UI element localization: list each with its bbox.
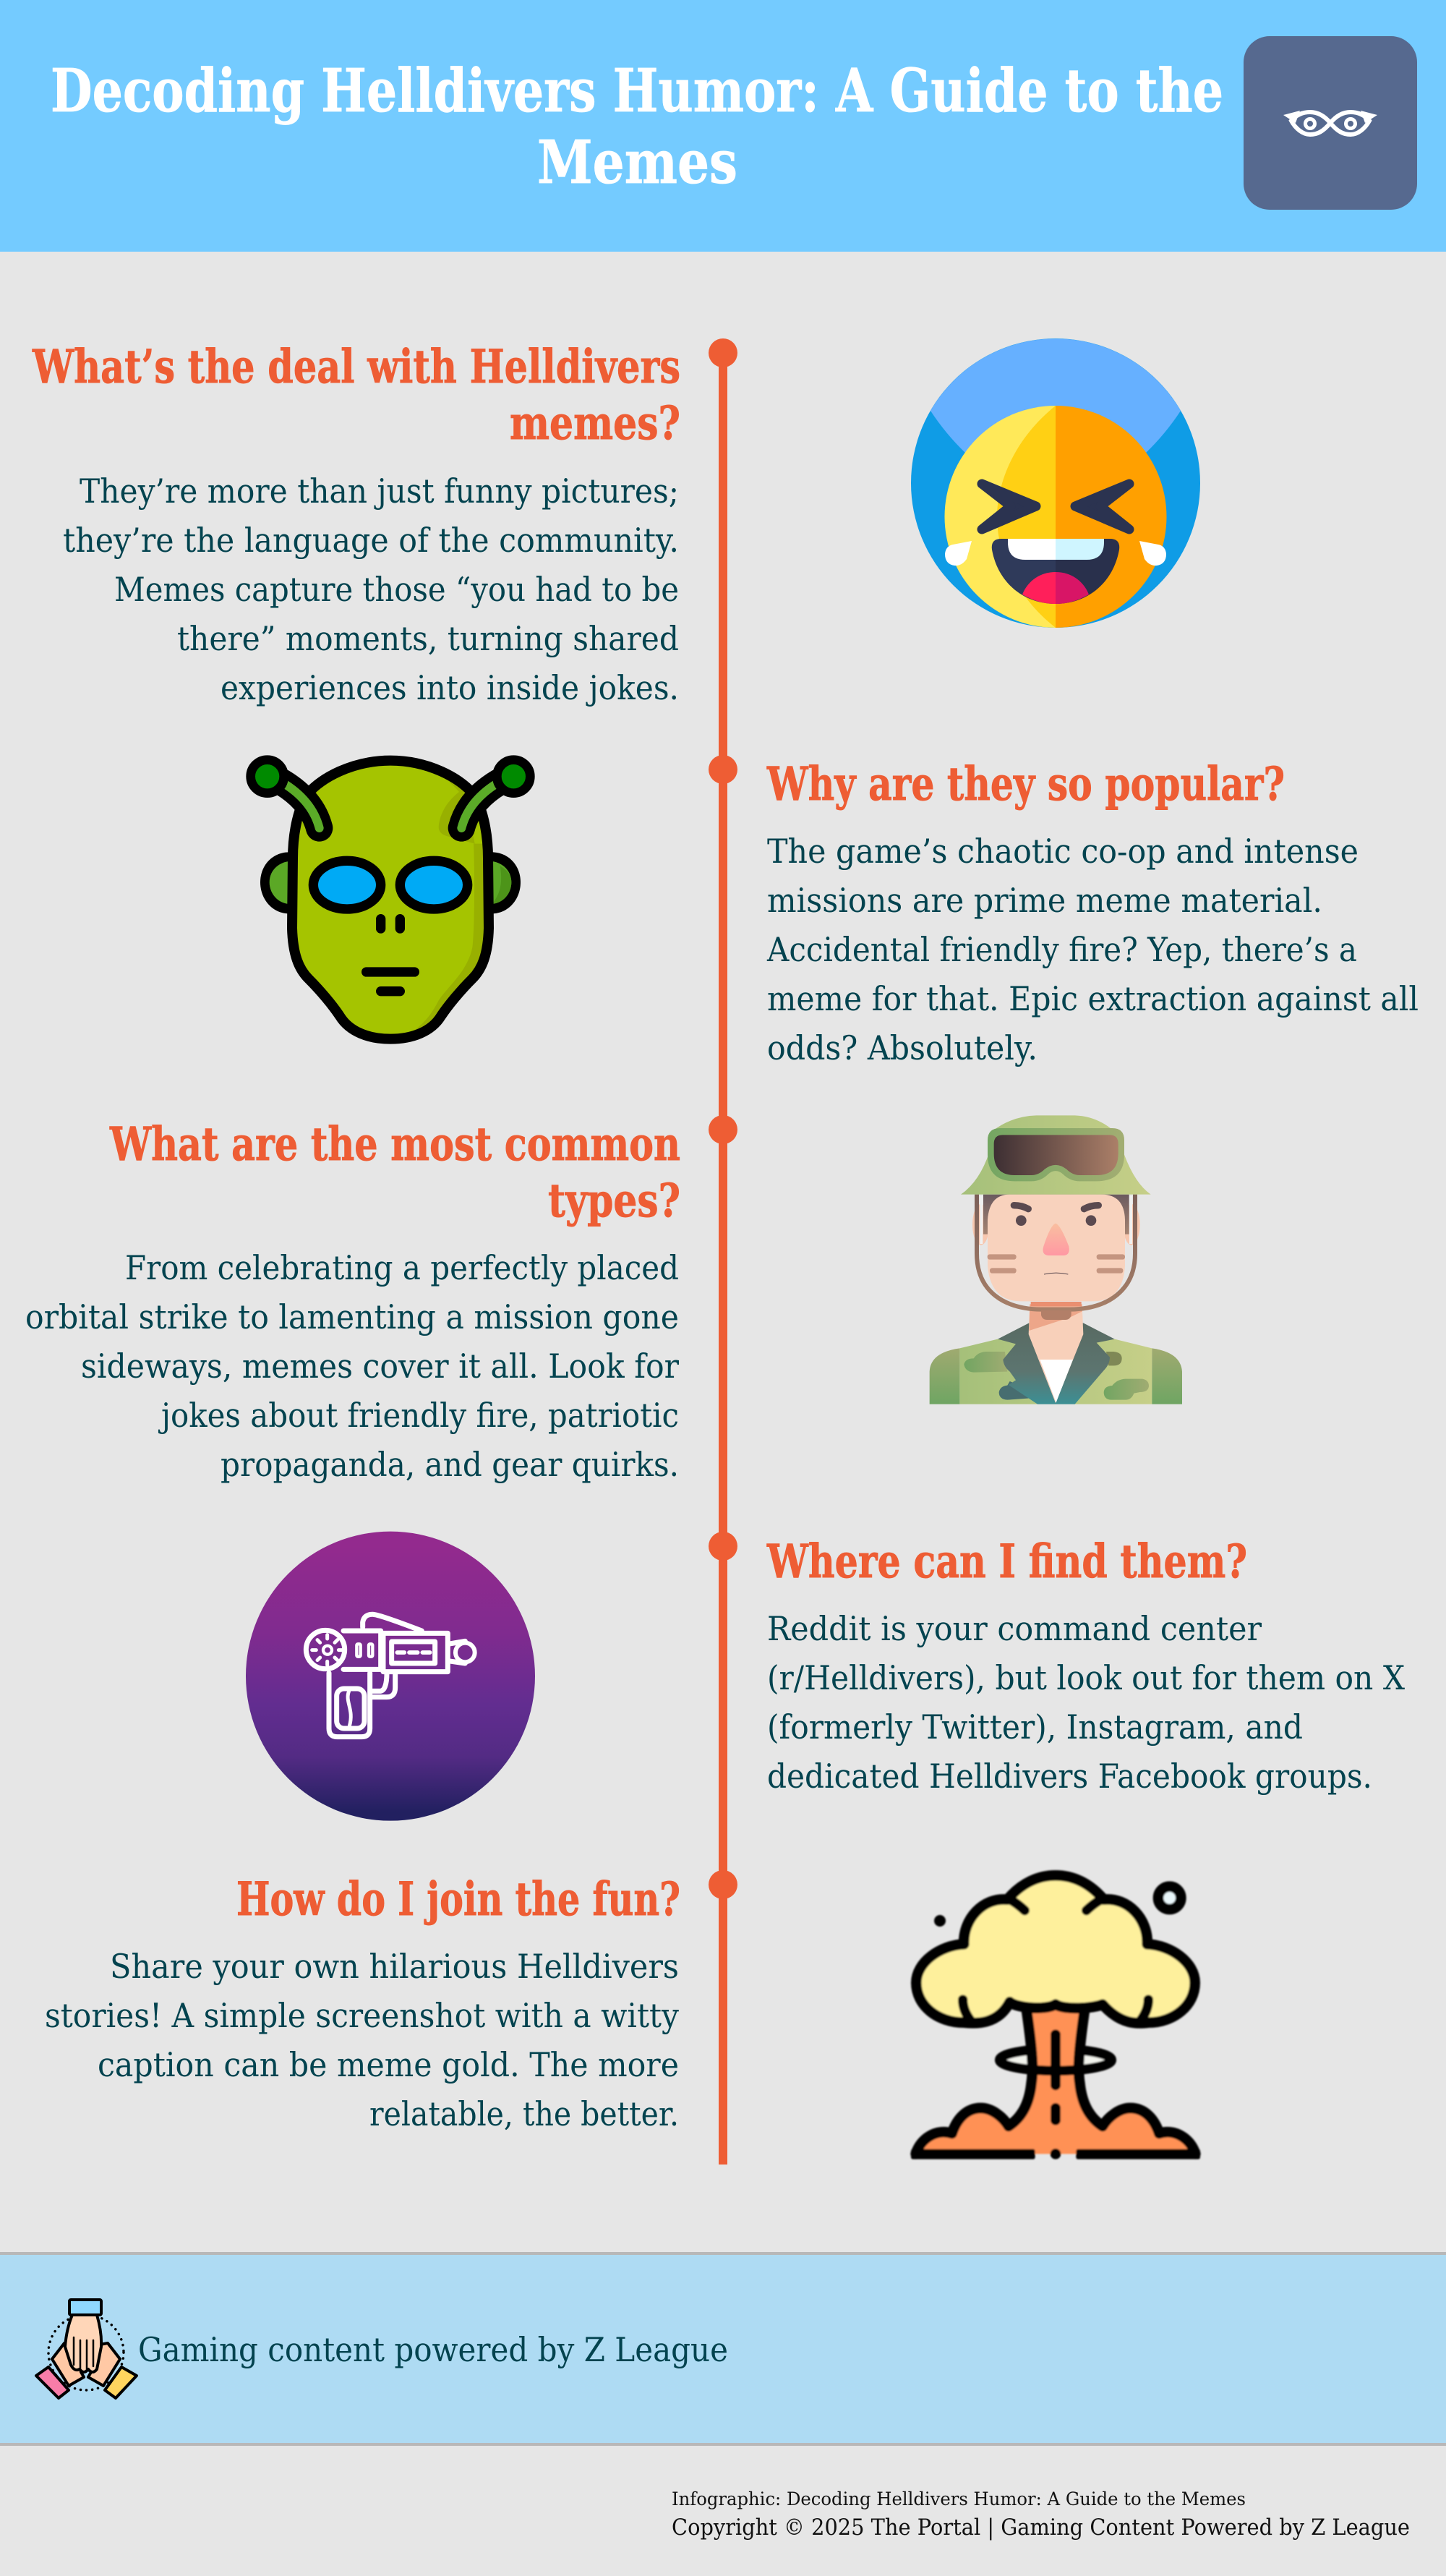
text block: caption can be meme gold. The more — [98, 2046, 679, 2084]
heading: What are the most common — [109, 1117, 680, 1171]
icon: soldier — [930, 1115, 1182, 1404]
text block: odds? Absolutely. — [767, 1029, 1038, 1067]
header banner — [0, 0, 1446, 252]
text block: stories! A simple screenshot with a witty — [45, 1997, 679, 2035]
icon: laughing emoji — [911, 338, 1200, 628]
icon: ray gun — [246, 1532, 535, 1821]
title — [51, 56, 1223, 197]
heading: Where can I find them? — [766, 1534, 1247, 1588]
heading: memes? — [510, 396, 680, 450]
heading: What’s the deal with Helldivers — [32, 339, 680, 393]
text block: (formerly Twitter), Instagram, and — [767, 1708, 1303, 1747]
panel: why so popular — [766, 756, 1419, 1067]
text block: missions are prime meme material. — [767, 882, 1322, 920]
icon: eyes logo — [1244, 36, 1417, 210]
text block: propaganda, and gear quirks. — [221, 1446, 679, 1484]
text block: they’re the language of the community. — [63, 521, 679, 560]
text block — [766, 832, 1419, 1067]
text block: The game’s chaotic co-op and intense — [767, 832, 1359, 871]
text block: relatable, the better. — [369, 2095, 679, 2133]
heading: How do I join the fun? — [236, 1872, 680, 1926]
text block — [63, 472, 679, 707]
text block — [767, 1610, 1406, 1796]
text block: Memes capture those “you had to be — [114, 571, 679, 609]
text block: From celebrating a perfectly placed — [125, 1249, 679, 1287]
panel: how to join — [45, 1872, 680, 2133]
footer: Copyright © 2025 The Portal | Gaming Content Powered by Z League — [672, 2515, 1410, 2541]
heading — [109, 1117, 680, 1227]
text block: jokes about friendly fire, patriotic — [158, 1396, 679, 1435]
text block: sideways, memes cover it all. Look for — [81, 1347, 679, 1386]
text block: They’re more than just funny pictures; — [80, 472, 679, 511]
footer: Infographic: Decoding Helldivers Humor: A Guide to the Memes — [672, 2488, 1246, 2510]
footer — [672, 2488, 1410, 2541]
text block — [25, 1249, 679, 1484]
text block: experiences into inside jokes. — [221, 669, 679, 707]
text block: Share your own hilarious Helldivers — [110, 1948, 679, 1986]
heading: types? — [548, 1173, 680, 1227]
title: Memes — [537, 128, 737, 197]
timeline — [709, 338, 737, 2165]
panel: common types — [25, 1117, 680, 1484]
sponsor band — [0, 2252, 1446, 2446]
text block: dedicated Helldivers Facebook groups. — [767, 1757, 1372, 1796]
sponsor text: Gaming content powered by Z League — [138, 2331, 728, 2369]
text block: Accidental friendly fire? Yep, there’s a — [766, 931, 1357, 969]
heading: Why are they so popular? — [766, 756, 1285, 811]
icon: alien head — [251, 760, 530, 1039]
heading — [32, 339, 680, 450]
panel: what's the deal — [32, 339, 680, 707]
text block: meme for that. Epic extraction against all — [767, 980, 1419, 1018]
text block: orbital strike to lamenting a mission gone — [25, 1298, 679, 1336]
text block: Reddit is your command center — [767, 1610, 1262, 1648]
text block: (r/Helldivers), but look out for them on X — [767, 1659, 1406, 1697]
icon: joined hands — [36, 2300, 137, 2398]
panel: where to find them — [766, 1534, 1406, 1796]
icon: mushroom cloud — [911, 1875, 1200, 2159]
text block — [45, 1948, 679, 2133]
text block: there” moments, turning shared — [177, 620, 679, 658]
